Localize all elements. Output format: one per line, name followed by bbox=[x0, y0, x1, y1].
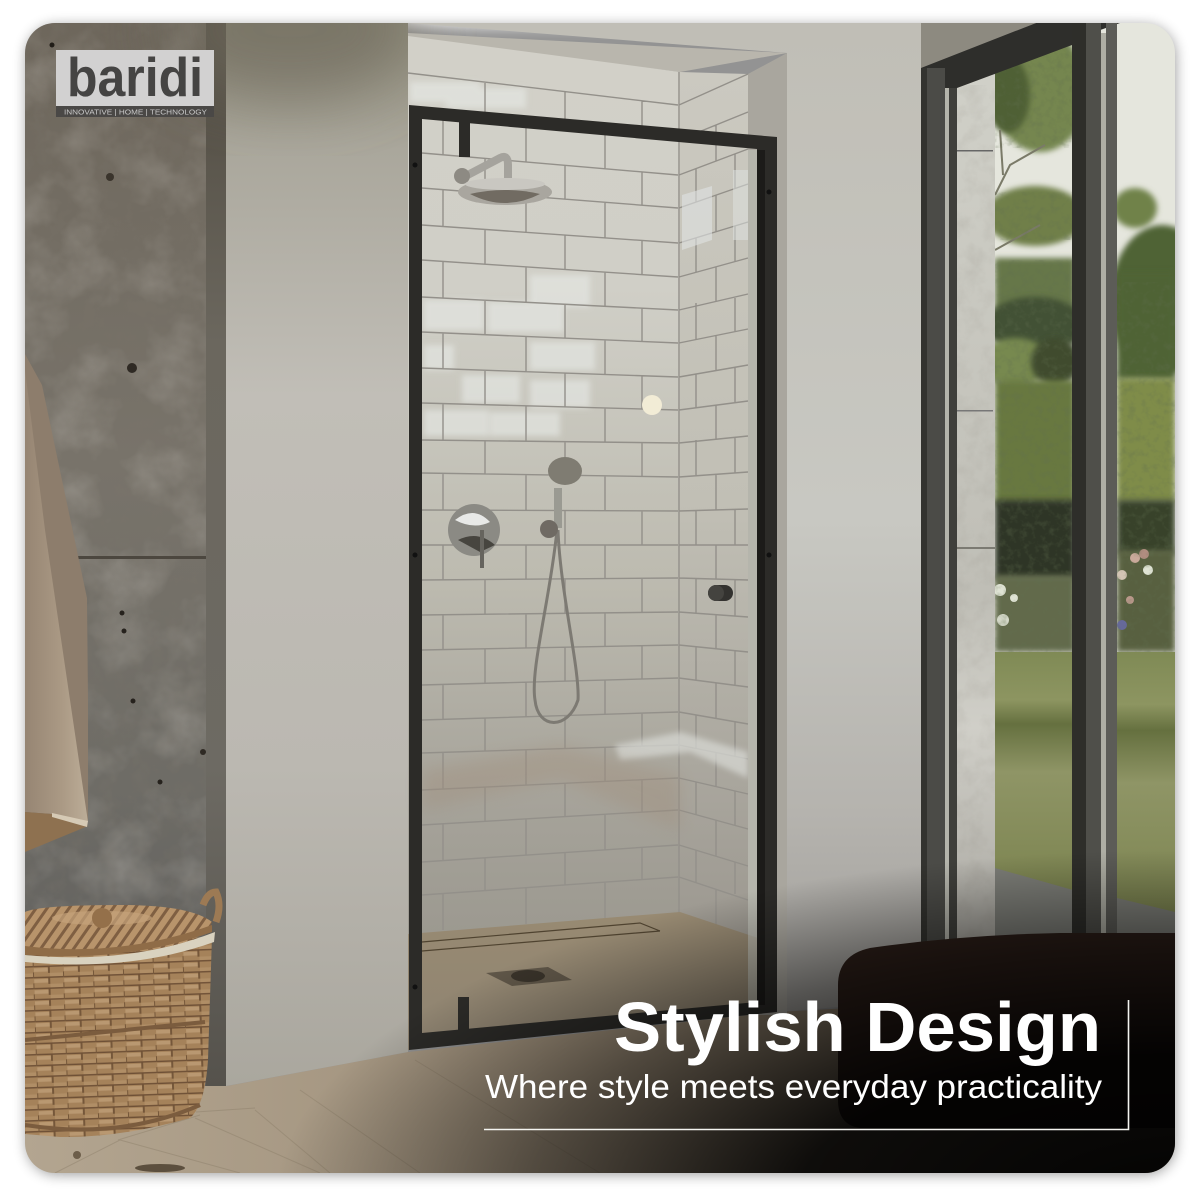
trees through left pane bbox=[995, 45, 1072, 652]
panel: plaster wall right of shower bbox=[408, 23, 921, 1012]
logo plate bbox=[56, 50, 214, 106]
dark gradient overlay bbox=[304, 861, 1175, 1173]
mortar lines bbox=[408, 73, 678, 930]
icon: rain shower head bbox=[454, 157, 552, 205]
reflected bench bbox=[615, 732, 748, 778]
reflections on tiles bbox=[410, 82, 595, 436]
panel: tile back wall bbox=[408, 36, 680, 935]
leaf texture: upper left pane bbox=[995, 40, 1073, 148]
wall shadow top bbox=[160, 0, 420, 100]
icon: dark ottoman bbox=[838, 933, 1175, 1128]
panel: concrete column outside bbox=[957, 74, 995, 945]
title: Stylish Design bbox=[614, 988, 1101, 1066]
panel: tile side wall bbox=[679, 72, 748, 935]
logo tagline strip bbox=[56, 106, 214, 117]
icon: door knob bbox=[708, 585, 733, 601]
subtitle: Where style meets everyday practicality bbox=[485, 1068, 1103, 1105]
caption corner rule bbox=[484, 1000, 1128, 1130]
icon: hand shower bbox=[534, 457, 582, 722]
icon: floor drain bbox=[486, 967, 572, 986]
reflected warm band bbox=[424, 750, 676, 819]
panel: shower door frame bbox=[409, 105, 777, 1050]
panel: concrete wall bbox=[25, 23, 226, 1113]
leaf texture: middle left pane bbox=[995, 192, 1073, 240]
panel: black window frame bbox=[921, 23, 1120, 948]
paving right bbox=[1117, 898, 1175, 933]
glass edge strip bbox=[748, 150, 757, 1003]
panel: plaster wall left of shower bbox=[226, 23, 408, 1086]
logo wordmark: baridi bbox=[67, 46, 203, 108]
icon: wicker laundry basket bbox=[25, 892, 219, 1137]
paving left bbox=[995, 868, 1072, 936]
lawn left bbox=[995, 652, 1073, 892]
panel: wood floor bbox=[25, 1008, 1175, 1173]
icon: lamp reflection bbox=[642, 395, 662, 415]
trees through right pane bbox=[1117, 184, 1175, 652]
icon: hanging towel bbox=[25, 354, 88, 852]
shower floor bbox=[408, 912, 758, 1050]
leaf texture: lower left pane bbox=[995, 260, 1073, 652]
panel: concrete lintel bbox=[921, 23, 1036, 70]
logo bbox=[56, 46, 214, 117]
icon: mixer valve bbox=[448, 504, 500, 568]
leaf texture: right pane bbox=[1117, 372, 1175, 652]
panel: niche ceiling and reveal bbox=[408, 33, 787, 1015]
lawn right bbox=[1117, 652, 1175, 914]
logo tagline strip: INNOVATIVE | HOME | TECHNOLOGY bbox=[64, 108, 207, 116]
panel: garden view bbox=[995, 23, 1175, 936]
